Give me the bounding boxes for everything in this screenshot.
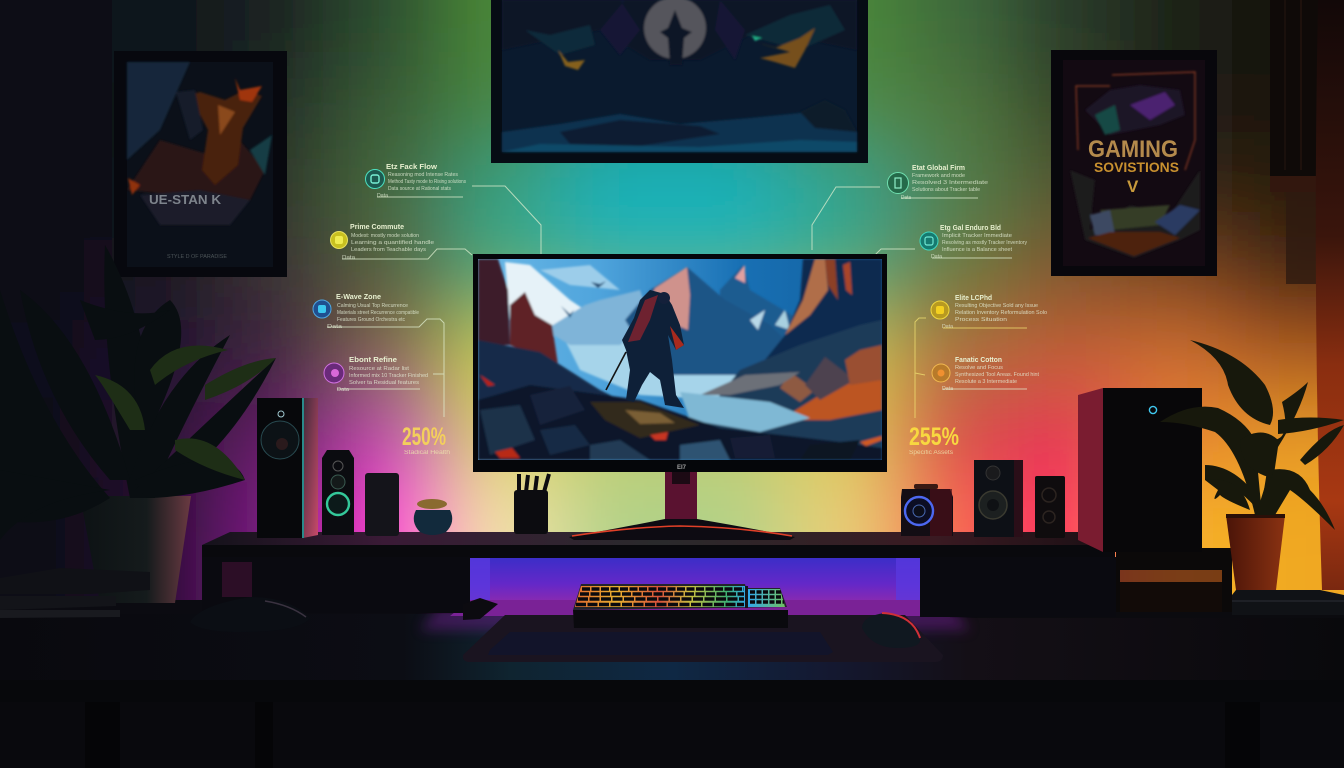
body text xyxy=(931,233,1027,260)
body text: Data xyxy=(942,324,953,330)
stat: 255% right: 255% xyxy=(909,423,959,451)
wrist rest xyxy=(488,632,833,655)
foreground rocks xyxy=(478,385,882,460)
body text: Data xyxy=(327,324,342,330)
callout: fourth left xyxy=(324,357,428,393)
body text: Leaders from Teachable days xyxy=(351,247,427,253)
speaker: narrow xyxy=(1035,476,1065,538)
body text xyxy=(337,366,428,393)
right plant xyxy=(1160,340,1344,590)
monitor xyxy=(473,254,887,540)
poster: left dark warrior: UE-STAN K xyxy=(149,192,222,207)
icon: yellow ring xyxy=(330,232,348,248)
icon: purple ring xyxy=(324,363,344,383)
body text: Method Tasty mode to Rising solutions xyxy=(388,179,466,185)
mousepad xyxy=(463,615,943,662)
callout: fourth right xyxy=(932,357,1040,392)
heading: Etat Global Firm xyxy=(912,165,965,172)
poster: top centre fantasy landscape xyxy=(491,0,868,163)
pot xyxy=(80,496,191,603)
underline xyxy=(337,388,420,390)
body text xyxy=(901,173,988,201)
bookcase top right xyxy=(1270,0,1322,284)
icon: teal ring xyxy=(920,232,938,250)
body text: Solutions about Tracker table xyxy=(912,187,980,193)
body text: Data xyxy=(377,193,388,199)
left plant xyxy=(0,245,276,603)
body text: Synthesized Tool Areas. Found hint xyxy=(955,372,1040,378)
connector xyxy=(327,319,444,417)
heading: Fanatic Cotton xyxy=(955,357,1002,364)
wall background with RGB glow xyxy=(11,0,1344,600)
body text: Calming Usual Top Recurrence xyxy=(337,303,408,309)
connector xyxy=(342,249,472,259)
connector xyxy=(812,187,978,250)
heading: Ebont Refine xyxy=(349,357,397,364)
body text: Data xyxy=(342,255,355,261)
callout: top right xyxy=(812,165,988,250)
book stack right xyxy=(1232,590,1344,615)
small device xyxy=(463,598,498,620)
body text: Relation Inventory Reformulation Solo xyxy=(955,310,1047,316)
underline xyxy=(943,388,1027,390)
heading: Prime Commute xyxy=(350,224,404,231)
speaker: tall left xyxy=(257,398,318,538)
body text xyxy=(342,233,434,261)
desk surface xyxy=(0,600,1344,768)
stat: 250% left: Stadical Health xyxy=(404,450,450,456)
lava xyxy=(495,448,520,458)
body text: Data xyxy=(337,387,349,393)
poster: right Gaming Sovistions: V xyxy=(1127,177,1139,196)
icon: blue ring xyxy=(313,300,331,318)
monitor stand xyxy=(569,472,795,540)
connector xyxy=(915,318,1027,418)
pen holder xyxy=(514,474,549,534)
cylinder speaker xyxy=(365,473,399,536)
connector xyxy=(377,186,541,254)
subwoofer xyxy=(1078,388,1202,552)
speaker: bookshelf xyxy=(974,460,1023,537)
body text: Resolved 3 Intermediate xyxy=(912,180,988,186)
heading: Etg Gal Enduro Bld xyxy=(940,225,1001,232)
poster: right Gaming Sovistions xyxy=(1051,50,1217,276)
body text: Reasoning mod Intense Rates xyxy=(388,172,459,178)
poster: right Gaming Sovistions: SOVISTIONS xyxy=(1094,159,1179,175)
body text: Resolving as mostly Tracker Inventory xyxy=(942,240,1027,246)
body text: Learning a quantified handle xyxy=(351,240,434,246)
body text: Influence is a Balance sheet xyxy=(942,247,1013,253)
lit leaves xyxy=(95,346,276,480)
body text: Resulting Objective Sold any Issue xyxy=(955,303,1038,309)
poster: left dark warrior: STYLE D OF PARADISE xyxy=(167,254,228,260)
body text: Framework and mode xyxy=(912,173,965,179)
pot xyxy=(1226,515,1285,590)
callout: second left xyxy=(330,224,472,261)
body text xyxy=(942,365,1040,392)
stat: 250% left: 250% xyxy=(402,423,446,451)
heading: Elite LCPhd xyxy=(955,295,992,302)
icon: orange ring xyxy=(932,364,950,382)
body text: Resolute a 3 Intermediate xyxy=(955,379,1017,385)
keycaps xyxy=(576,589,784,604)
body text: Resolve and Focus xyxy=(955,365,1004,371)
icon: amber ring xyxy=(931,301,949,319)
dark foliage xyxy=(0,245,276,540)
heading: Etz Fack Flow xyxy=(386,164,438,171)
body text: Features Ground Orchestra etc xyxy=(337,317,405,323)
body text: Materials street Recurrence compatible xyxy=(337,310,419,316)
screen artwork xyxy=(478,259,882,460)
body text: Modest: mostly mode solution xyxy=(351,233,419,239)
stat: 255% right xyxy=(909,423,959,456)
clouds and mist xyxy=(504,260,582,327)
speaker: blue ring cube xyxy=(901,484,953,536)
body text: Implicit Tracker Immediate xyxy=(942,233,1012,239)
rgb backlight xyxy=(575,586,785,607)
heading: E-Wave Zone xyxy=(336,294,381,301)
brand mark: EI7 xyxy=(677,465,687,471)
callout: third right xyxy=(915,295,1047,418)
body text: Data xyxy=(901,195,911,201)
body text: Data xyxy=(942,386,953,392)
body text: Data xyxy=(931,254,942,260)
central mountain xyxy=(625,267,790,375)
body text xyxy=(942,303,1047,330)
hero xyxy=(606,290,684,408)
monitor frame xyxy=(473,254,887,472)
body text: Solver ta Residual features xyxy=(349,380,420,386)
under-shelf purple glow xyxy=(420,557,970,630)
body text xyxy=(377,172,466,199)
body text: Resource at Radar list xyxy=(349,366,410,372)
icon: green ring xyxy=(888,172,908,194)
shelf riser xyxy=(202,532,1232,617)
leaves xyxy=(1160,340,1344,530)
gaming mouse left xyxy=(190,597,310,632)
stat: 255% right: Specific Assets xyxy=(909,450,953,456)
curtain right xyxy=(1316,0,1344,590)
stat: 250% left xyxy=(402,423,450,456)
body text: Data source at Rational stats xyxy=(388,186,451,192)
icon: teal ring xyxy=(366,170,384,188)
left cliffs xyxy=(478,259,510,345)
right cliffs xyxy=(766,259,882,360)
far peaks xyxy=(545,290,650,345)
body text xyxy=(327,303,419,330)
poster: right Gaming Sovistions: GAMING xyxy=(1088,136,1178,163)
gaming mouse right xyxy=(862,613,920,648)
body text: Informed mix 10 Tracker Finished xyxy=(349,373,428,379)
connector xyxy=(875,249,1012,258)
birds xyxy=(591,281,606,288)
poster: left dark warrior xyxy=(114,51,287,277)
callout: third left xyxy=(313,294,444,417)
keyboard xyxy=(573,584,788,628)
callout: second right xyxy=(875,225,1027,260)
callout: top left xyxy=(366,164,541,254)
speaker: green ring xyxy=(322,450,354,535)
body text: Process Situation xyxy=(955,317,1007,323)
ceramic pot xyxy=(414,499,452,535)
book stack left xyxy=(0,568,150,618)
